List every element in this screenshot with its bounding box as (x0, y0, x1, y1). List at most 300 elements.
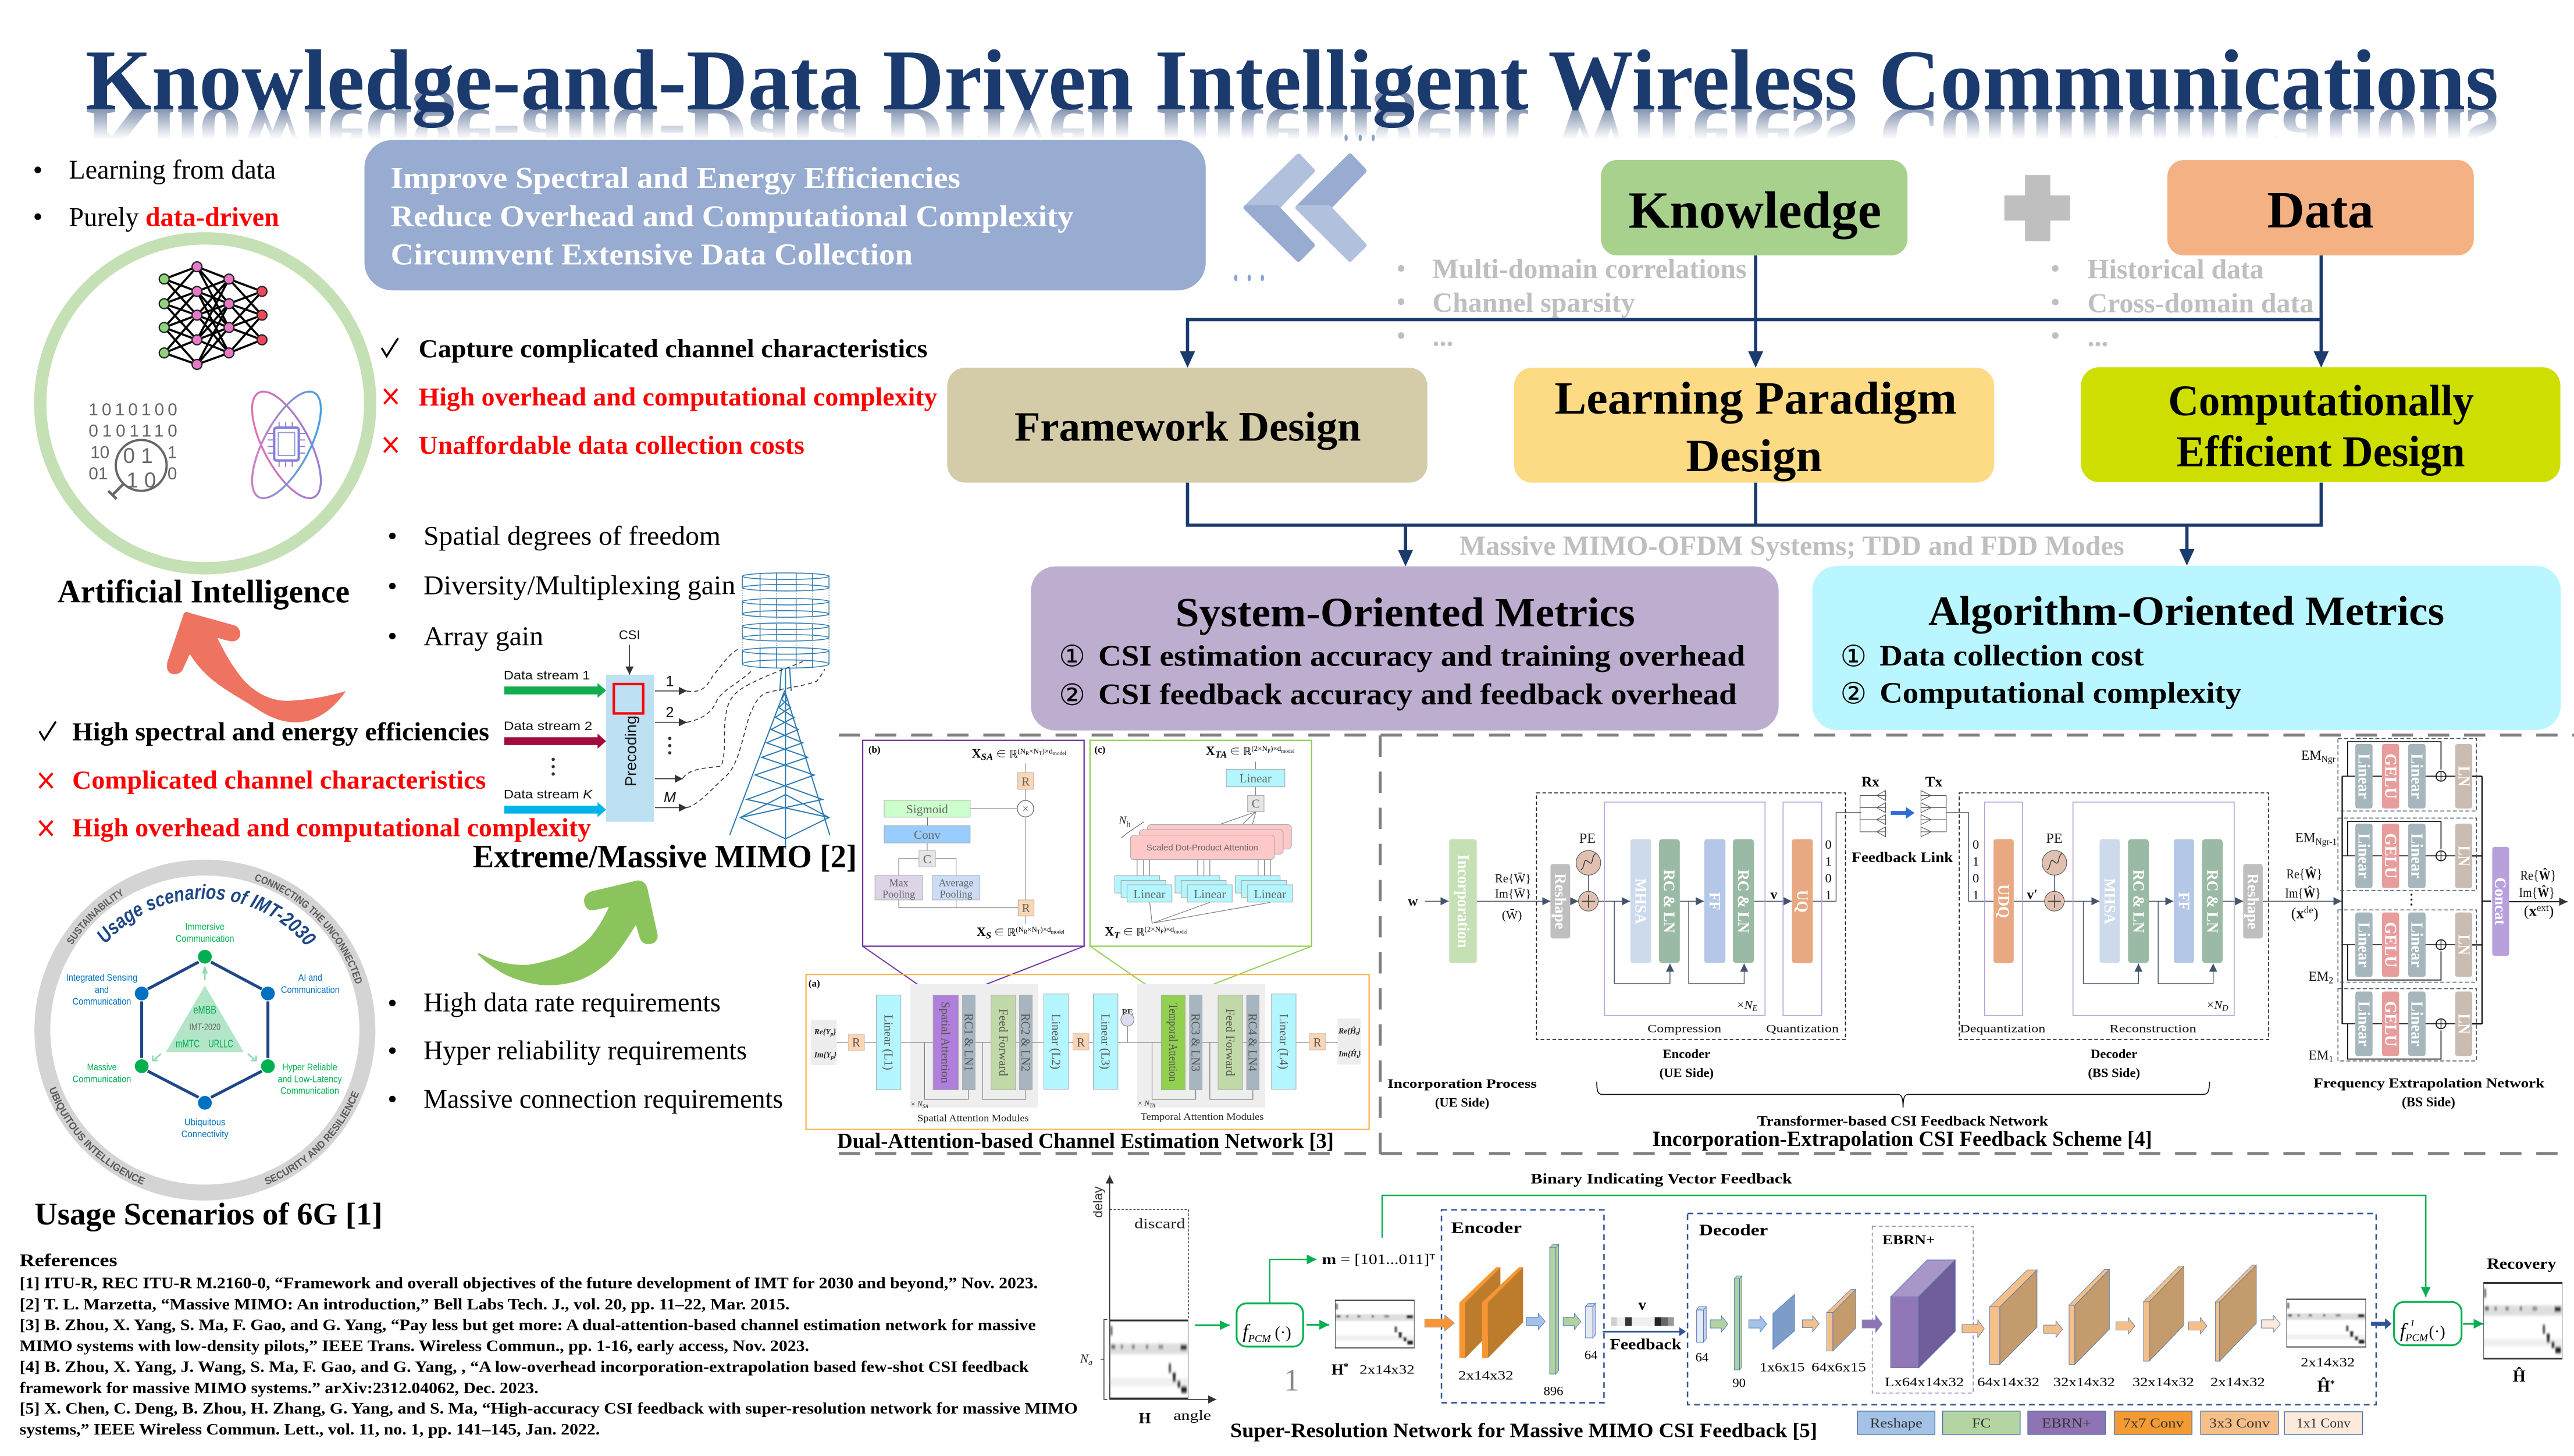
EM module row 1: Linear (2408, 753, 2426, 799)
sub-panel a: t (1356, 1030, 1358, 1037)
sub-panel b: spatial attention: S (986, 930, 991, 941)
reference list: [1] ITU-R, REC ITU-R M.2160-0, “Framework and overall objectives of the future development of IMT for 2030 and beyond,” Nov. 2023. (20, 1274, 1038, 1291)
EM module row 3: Linear (2355, 922, 2373, 967)
ring labels: UBIQUITOUS INTELLIGENCE (50, 1087, 145, 1185)
encoder blocks (1550, 839, 1813, 963)
list: MIMO challenges right (382, 334, 937, 460)
sub-panel a: × N (1137, 1099, 1149, 1108)
side labels: (BS Side) (2088, 1065, 2140, 1080)
scenario labels: Immersive (185, 921, 225, 932)
sub-panel b: spatial attention: ×N (1027, 925, 1037, 934)
antenna array (742, 573, 829, 668)
box: Data (2167, 160, 2474, 255)
side labels: Incorporation Process (1387, 1076, 1537, 1091)
compressed CSI: 1 (1284, 1362, 1300, 1397)
icon: binary magnifier (88, 400, 177, 499)
data examples (2052, 254, 2313, 353)
reconstructed CSI: Ĥ (2317, 1378, 2330, 1396)
sub-panel c: temporal attention: Scaled Dot-Product Attention (1147, 843, 1258, 853)
sub-panel a: RC1 & LN1 (962, 1013, 976, 1071)
decoder blocks: RC & LN (2130, 870, 2147, 933)
incorporation block (1449, 839, 1477, 963)
icon: cross (384, 389, 397, 404)
box: System-Oriented Metrics: ① (1059, 640, 1085, 673)
feedback vector (1603, 1296, 1686, 1353)
reference list: [4] B. Zhou, X. Yang, J. Wang, S. Ma, F. Gao, and G. Yang, , “A low-overhead incorporation-extrapolation based few-shot CSI feedback (20, 1358, 1030, 1375)
icon: cross (40, 773, 52, 788)
sub-panel c: temporal attention: X (1206, 743, 1215, 758)
positional encoding: PE (1122, 1008, 1133, 1017)
sub-panel b: spatial attention: R (1026, 751, 1030, 757)
IMT-2020 triangle: eMBB (193, 1005, 216, 1017)
bits and math labels: Quantization (1766, 1023, 1839, 1035)
brace (1597, 1082, 2209, 1108)
bits and math labels: Im{W̄} (1495, 887, 1531, 900)
reference list: systems,” IEEE Wireless Commun. Lett., vol. 11, no. 1, pp. 141–145, Jan. 2022. (20, 1421, 600, 1438)
delay-angle plot (1080, 1176, 1216, 1427)
sub-panel b: spatial attention: Conv (914, 828, 941, 842)
icon: check (40, 721, 56, 739)
sub-panel a: Feed Forward (1223, 1009, 1237, 1076)
sub-panel a: Re{Ĥ (1338, 1026, 1356, 1035)
sub-panel a: Temporal Attention (1166, 1003, 1180, 1081)
encoder blocks: MHSA (1632, 878, 1650, 924)
sub-panel a: RC4 & LN4 (1246, 1013, 1260, 1071)
bits and math labels: v′ (2027, 888, 2038, 903)
decoder blocks: FF (2175, 892, 2192, 910)
delay-angle plot: H (1139, 1409, 1151, 1427)
bits and math labels: Reconstruction (2109, 1023, 2197, 1035)
EM module row 3: LN (2454, 934, 2472, 955)
EM module row 1 (2338, 738, 2476, 811)
sub-panel a: RC2 & LN2 (1019, 1013, 1033, 1071)
sub-panel a: Feed Forward (996, 1009, 1010, 1076)
list: MIMO pros and cons left (40, 718, 591, 842)
extrapolation labels: 2 (2329, 976, 2333, 985)
PCM function: f (1243, 1321, 1248, 1343)
list: MIMO benefits: Array gain (423, 622, 543, 652)
extrapolation labels: EM (2301, 748, 2322, 763)
sub-panel a: } (1357, 1026, 1361, 1035)
scenario labels: Communication (281, 984, 340, 995)
sub-panel c: temporal attention: N (1119, 814, 1126, 827)
scenario labels: and (95, 984, 109, 995)
sub-panel b: spatial attention: Pooling (882, 888, 915, 900)
sub-panel c: temporal attention: X (1105, 924, 1114, 939)
list: MIMO pros and cons left: High overhead and computational complexity (72, 814, 591, 842)
heading: incorporation-extrapolation: Incorporation-Extrapolation CSI Feedback Scheme [4] (1652, 1127, 2152, 1151)
sub-panel a: Im{Y (814, 1050, 831, 1059)
box: Algorithm-Oriented Metrics: ② (1840, 678, 1867, 710)
encoder blocks: UQ (1793, 890, 1811, 913)
sub-panel c: temporal attention: (c) (1094, 744, 1105, 755)
EM module row 4: LN (2454, 1013, 2472, 1034)
decoder: Decoder (1699, 1220, 1768, 1238)
feedback link: Feedback Link (1852, 849, 1953, 866)
data streams: Data stream 1 (504, 668, 590, 682)
sub-panel c: temporal attention: h (1126, 820, 1130, 829)
heading: Artificial Intelligence: Artificial Intelligence (58, 574, 350, 610)
sub-panel a: Temporal Attention Modules (1141, 1111, 1263, 1122)
scenario labels: AI and (298, 972, 322, 983)
sub-panel b: spatial attention: )×d (1042, 746, 1053, 755)
bits and math labels: ×N (2206, 999, 2222, 1012)
sub-panel b: spatial attention: )×d (1040, 925, 1051, 934)
box: Computationally Efficient Design: Computationally (2168, 377, 2474, 425)
legend: EBRN+ (2042, 1416, 2091, 1431)
delay-angle plot: a (1088, 1358, 1092, 1368)
side labels: Encoder (1663, 1046, 1710, 1061)
bits and math labels (1408, 837, 2228, 1035)
sub-panel b: spatial attention: Sigmoid (906, 802, 948, 816)
arc title: Usage scenarios of IMT-2030 (97, 884, 316, 945)
list: MIMO challenges right: Unaffordable data collection costs (419, 431, 804, 460)
decoder: 64 (1696, 1350, 1708, 1365)
box: Knowledge (1601, 160, 1907, 255)
knowledge examples: Channel sparsity (1433, 287, 1635, 318)
PCM function: T (1429, 1252, 1436, 1262)
delay-angle plot: delay (1091, 1186, 1105, 1218)
note: system modes: Massive MIMO-OFDM Systems; TDD and FDD Modes (1459, 531, 2124, 561)
panel: massive MIMO diagram (473, 573, 857, 875)
sub-panel a: Im{Ĥ (1338, 1049, 1357, 1058)
sub-panel a: × N (910, 1099, 923, 1108)
sub-panel c: temporal attention: )×d (1163, 925, 1174, 934)
scenario labels: Communication (280, 1085, 339, 1097)
decoder box (1959, 793, 2269, 1040)
sub-panel b: spatial attention: Max (889, 877, 909, 888)
references (20, 1250, 1078, 1438)
box: Algorithm-Oriented Metrics: ① (1840, 640, 1867, 673)
outer ring (42, 867, 368, 1192)
sub-panel a: Linear (L1) (882, 1014, 896, 1070)
panel: dual-attention channel estimation network (806, 741, 1369, 1153)
sub-panel a: Spatial Attention Modules (917, 1112, 1029, 1123)
sub-panel a: SA (923, 1103, 928, 1109)
EM module row 2 (2338, 818, 2476, 891)
inverse PCM function: (·) (2425, 1323, 2445, 1341)
heading: frequency extrapolation (2313, 1076, 2544, 1110)
sub-panel b: spatial attention: C (923, 852, 931, 866)
sub-panel c: temporal attention (1090, 741, 1312, 946)
icon: AI atom chip (238, 382, 334, 508)
scenario labels: Communication (73, 996, 131, 1007)
list: 6G requirements: Massive connection requirements (423, 1084, 783, 1114)
encoder: 2x14x32 (1458, 1368, 1514, 1383)
sub-panel a: t (1357, 1053, 1358, 1060)
box: System-Oriented Metrics: System-Oriented Metrics (1176, 590, 1635, 636)
side labels: (UE Side) (1660, 1065, 1714, 1080)
bullet list: AI traits: Learning from data (69, 155, 276, 185)
data streams: Data stream K (504, 788, 593, 802)
icon: binary magnifier: 0 1 (123, 444, 153, 468)
panel: incorporation-extrapolation CSI feedback (1387, 738, 2568, 1151)
EM module row 1: GELU (2381, 753, 2399, 799)
PCM function: m = [101...011] (1322, 1251, 1416, 1268)
box: Learning Paradigm Design: Learning Paradigm (1554, 373, 1957, 424)
knowledge examples (1398, 254, 1747, 352)
sub-panel c: temporal attention: Linear (1254, 887, 1286, 901)
conv plates: 32x14x32 (2132, 1375, 2194, 1389)
sub-panel c: temporal attention: C (1252, 796, 1260, 810)
incorporation block: Incorporation (1454, 855, 1473, 948)
conv plates (1962, 1265, 2280, 1389)
box: System-Oriented Metrics (1031, 567, 1779, 731)
sub-panel a: R (852, 1035, 861, 1049)
icon: check (382, 338, 398, 356)
EM module row 2: GELU (2381, 833, 2399, 878)
list: 6G requirements: High data rate requirements (423, 988, 721, 1017)
recovery: Recovery (2487, 1255, 2556, 1272)
EM module row 3 (2338, 910, 2476, 982)
encoder blocks: RC & LN (1661, 870, 1678, 933)
extrapolation labels: Im{Ŵ} (2285, 885, 2321, 901)
PCM function (1195, 1251, 1436, 1347)
list: 6G requirements: Hyper reliability requirements (423, 1036, 747, 1066)
bits and math labels: E (1751, 1004, 1757, 1013)
EBRN+ block: EBRN+ (1882, 1233, 1935, 1248)
box: Computationally Efficient Design: Efficient Design (2176, 428, 2465, 476)
EBRN+ block: Lx64x14x32 (1885, 1375, 1964, 1389)
scenario labels (66, 921, 342, 1140)
icon: double chevron (1234, 134, 1375, 281)
scenario labels: Integrated Sensing (66, 972, 137, 983)
icon: cross (384, 437, 397, 452)
signal dashed curves (683, 649, 825, 807)
compressed CSI: H (1331, 1361, 1344, 1378)
concat block (2492, 847, 2568, 956)
zoom connector lines (863, 946, 1312, 995)
sub-panel c: temporal attention: model (1281, 749, 1295, 754)
EM module row 3: Linear (2408, 922, 2426, 967)
decoder: 64x6x15 (1811, 1360, 1866, 1375)
icon: binary magnifier: 1 0 (126, 468, 156, 492)
list: MIMO benefits (389, 521, 735, 652)
sub-panel b: spatial attention (863, 741, 1084, 946)
extrapolation labels: Ngr (2322, 754, 2336, 764)
sub-panel c: temporal attention: ∈ ℝ (1227, 746, 1251, 757)
sub-panel c: temporal attention: TA (1215, 749, 1227, 760)
title (86, 33, 2498, 185)
arrow: red curved (167, 612, 346, 722)
IMT-2020 triangle: IMT-2020 (189, 1021, 220, 1033)
inverse PCM function: −1 (2404, 1318, 2415, 1329)
panel: massive MIMO diagram: M (664, 789, 677, 806)
extrapolation labels: EM (2309, 1048, 2329, 1063)
sub-panel b: spatial attention: T (1037, 930, 1041, 935)
box: Learning Paradigm Design (1514, 368, 1994, 483)
sub-panel b: spatial attention: (N (1016, 925, 1065, 935)
callout: goals: Circumvent Extensive Data Collection (391, 238, 913, 271)
heading: dual attention: Dual-Attention-based Channel Estimation Network [3] (837, 1129, 1334, 1153)
icon: neural network (159, 262, 267, 369)
sub-panel a: } (833, 1027, 836, 1036)
decoder blocks: UDQ (1995, 884, 2013, 919)
delay-angle plot: N (1080, 1351, 1088, 1365)
sub-panel a: p (831, 1054, 834, 1060)
bits and math labels: 0 (1825, 837, 1832, 852)
arrowheads (1180, 351, 2329, 567)
positional encoders (1576, 831, 2067, 911)
compressed CSI (1284, 1300, 1415, 1397)
EM module row 2: Linear (2408, 833, 2426, 878)
EM module row 4: Linear (2408, 1001, 2426, 1046)
legend: 1x1 Conv (2297, 1416, 2351, 1431)
ring labels: CONNECTING THE UNCONNECTED (255, 874, 362, 984)
EM module row 4: Linear (2355, 1001, 2373, 1046)
knowledge examples: Multi-domain correlations (1433, 254, 1747, 284)
IMT-2020 triangle: mMTC (176, 1037, 200, 1049)
bits and math labels: 0 (1825, 871, 1832, 885)
extrapolation labels: de (2304, 905, 2313, 916)
legend: Reshape (1870, 1416, 1923, 1431)
encoder: 64 (1585, 1348, 1597, 1362)
extrapolation labels: Im{Ŵ} (2519, 885, 2555, 900)
box: Algorithm-Oriented Metrics (1813, 566, 2561, 730)
output ports (655, 691, 687, 807)
recovery (2483, 1255, 2562, 1386)
box: Computationally Efficient Design (2081, 367, 2561, 482)
title: Knowledge-and-Data Driven Intelligent Wireless Communications (86, 33, 2498, 128)
concat block: Concat (2492, 877, 2510, 925)
decoder blocks: MHSA (2101, 878, 2119, 924)
heading: Extreme/Massive MIMO: Extreme/Massive MIMO [2] (473, 839, 857, 875)
sub-panel a: } (1358, 1049, 1361, 1058)
bits and math labels: w (1408, 894, 1418, 909)
bits and math labels: Compression (1647, 1023, 1722, 1035)
box: Data: Data (2267, 181, 2374, 239)
EM module row 1: LN (2454, 766, 2472, 786)
bits and math labels: (W̄) (1502, 908, 1522, 922)
bits and math labels: Dequantization (1960, 1023, 2046, 1035)
sub-panel b: spatial attention: ×N (1029, 746, 1039, 755)
label: binary feedback: Binary Indicating Vector Feedback (1531, 1172, 1792, 1187)
box: System-Oriented Metrics: CSI estimation accuracy and training overhead (1098, 639, 1745, 672)
list: MIMO challenges right: High overhead and computational complexity (419, 383, 937, 411)
IMT-2020 triangle: URLLC (208, 1037, 233, 1049)
extrapolation labels (2285, 748, 2556, 1065)
encoder blocks: FF (1706, 892, 1724, 910)
precoding block (606, 675, 654, 822)
reference list: framework for massive MIMO systems.” arXiv:2312.04062, Dec. 2023. (20, 1379, 539, 1397)
legend: 3x3 Conv (2209, 1416, 2270, 1431)
hexagon nodes (135, 950, 275, 1110)
title reflection: Knowledge-and-Data Driven Intelligent Wireless Communications (86, 90, 2498, 185)
sub-panel b: spatial attention: R (1021, 774, 1030, 788)
extrapolation labels: ext (2537, 902, 2549, 913)
bits and math labels: ×N (1736, 999, 1752, 1012)
heading: Usage Scenarios of 6G: Usage Scenarios of 6G [1] (34, 1197, 383, 1231)
sub-panel a: Re{Y (814, 1027, 831, 1036)
extrapolation labels: (x (2524, 902, 2537, 920)
side labels (1387, 1046, 2140, 1110)
inverse PCM function: PCM (2405, 1332, 2429, 1344)
extrapolation labels: (x (2291, 905, 2304, 922)
bits and math labels: 0 (1973, 871, 1979, 885)
EM module row 3: GELU (2381, 922, 2399, 967)
bits and math labels: D (2221, 1004, 2228, 1013)
EBRN+ block (1872, 1226, 1973, 1393)
compressed CSI: 2x14x32 (1359, 1362, 1415, 1376)
reference list: [5] X. Chen, C. Deng, B. Zhou, H. Zhang, G. Yang, and S. Ma, “High-accuracy CSI feedback with super-resolution network for massive MIMO (20, 1400, 1078, 1417)
data examples: Historical data (2088, 254, 2264, 285)
tower (729, 668, 830, 849)
box: Algorithm-Oriented Metrics: Data collection cost (1879, 639, 2144, 672)
sub-panel b: spatial attention: × (1022, 803, 1029, 816)
extrapolation trunks (2342, 777, 2491, 1024)
network layer blocks (876, 994, 1296, 1090)
feedback vector: v (1638, 1296, 1646, 1313)
encoder blocks: RC & LN (1735, 870, 1752, 933)
sub-panel b: spatial attention: R (1022, 901, 1031, 915)
scenario labels: Hyper Reliable (282, 1062, 337, 1073)
box: System-Oriented Metrics: CSI feedback accuracy and feedback overhead (1098, 678, 1737, 711)
bits and math labels: 1 (1825, 888, 1832, 902)
encoder: 896 (1544, 1384, 1563, 1398)
bits and math labels: Re{W̄} (1495, 871, 1531, 885)
list: MIMO benefits: Spatial degrees of freedom (423, 521, 721, 551)
EM module row 2: LN (2454, 846, 2472, 866)
delay-angle plot: discard (1134, 1216, 1185, 1232)
extrapolation labels: EM (2295, 831, 2315, 846)
knowledge examples: ... (1433, 321, 1454, 352)
data examples: ... (2088, 322, 2109, 353)
scenario labels: and Low-Latency (278, 1073, 342, 1084)
side labels: (UE Side) (1435, 1095, 1489, 1110)
decoder: 1x6x15 (1760, 1360, 1805, 1375)
sub-panel a: Spatial Attention (939, 1002, 953, 1084)
recovery: Ĥ (2513, 1368, 2526, 1386)
reference list: MIMO systems with low-density pilots,” IEEE Trans. Wireless Commun., pp. 1-16, early access, Nov. 2023. (20, 1337, 809, 1355)
sub-panel b: spatial attention: (b) (868, 744, 881, 755)
legend: 7x7 Conv (2123, 1416, 2184, 1431)
legend: FC (1972, 1416, 1991, 1431)
sub-panel b: spatial attention: ∈ ℝ (993, 748, 1017, 760)
heading: frequency extrapolation: Frequency Extrapolation Network (2313, 1076, 2544, 1091)
box: Algorithm-Oriented Metrics: Algorithm-Oriented Metrics (1928, 589, 2444, 634)
reference list (20, 1274, 1078, 1438)
bits and math labels: 1 (1825, 854, 1832, 868)
EM module row 4 (2338, 989, 2476, 1061)
bits and math labels: v (1771, 888, 1778, 903)
side labels: Decoder (2091, 1046, 2137, 1061)
sub-panel a: TA (1149, 1102, 1155, 1108)
panel: super-resolution network (1080, 1172, 2562, 1442)
sub-panel c: temporal attention: ∈ ℝ (1120, 927, 1145, 938)
bits and math labels: 0 (1973, 837, 1979, 852)
PCM function: (·) (1270, 1324, 1291, 1342)
sub-panel b: spatial attention: Pooling (939, 888, 973, 900)
ring labels: SUSTAINABILITY (67, 889, 122, 945)
encoder blocks: Reshape (1551, 873, 1569, 929)
references heading: References (20, 1250, 118, 1270)
inverse PCM function (2371, 1302, 2483, 1345)
sub-panel c: temporal attention: P (1160, 929, 1163, 935)
encoder: Encoder (1451, 1218, 1522, 1236)
icon: cross (40, 821, 52, 835)
feedback link: Rx (1861, 774, 1879, 790)
feedback vector: Feedback (1610, 1336, 1681, 1353)
icon: binary magnifier: 1 (168, 443, 177, 462)
data examples: Cross-domain data (2088, 288, 2313, 319)
sub-panel b: spatial attention: R (1024, 930, 1028, 935)
data streams: Data stream 2 (504, 719, 592, 733)
ring labels: SECURITY AND RESILIENCE (265, 1091, 359, 1184)
list: MIMO challenges right: Capture complicated channel characteristics (419, 334, 927, 363)
sub-panel b: spatial attention: (N (1017, 746, 1066, 757)
list: 6G requirements (389, 988, 783, 1114)
list: MIMO benefits: Diversity/Multiplexing gain (423, 571, 735, 601)
